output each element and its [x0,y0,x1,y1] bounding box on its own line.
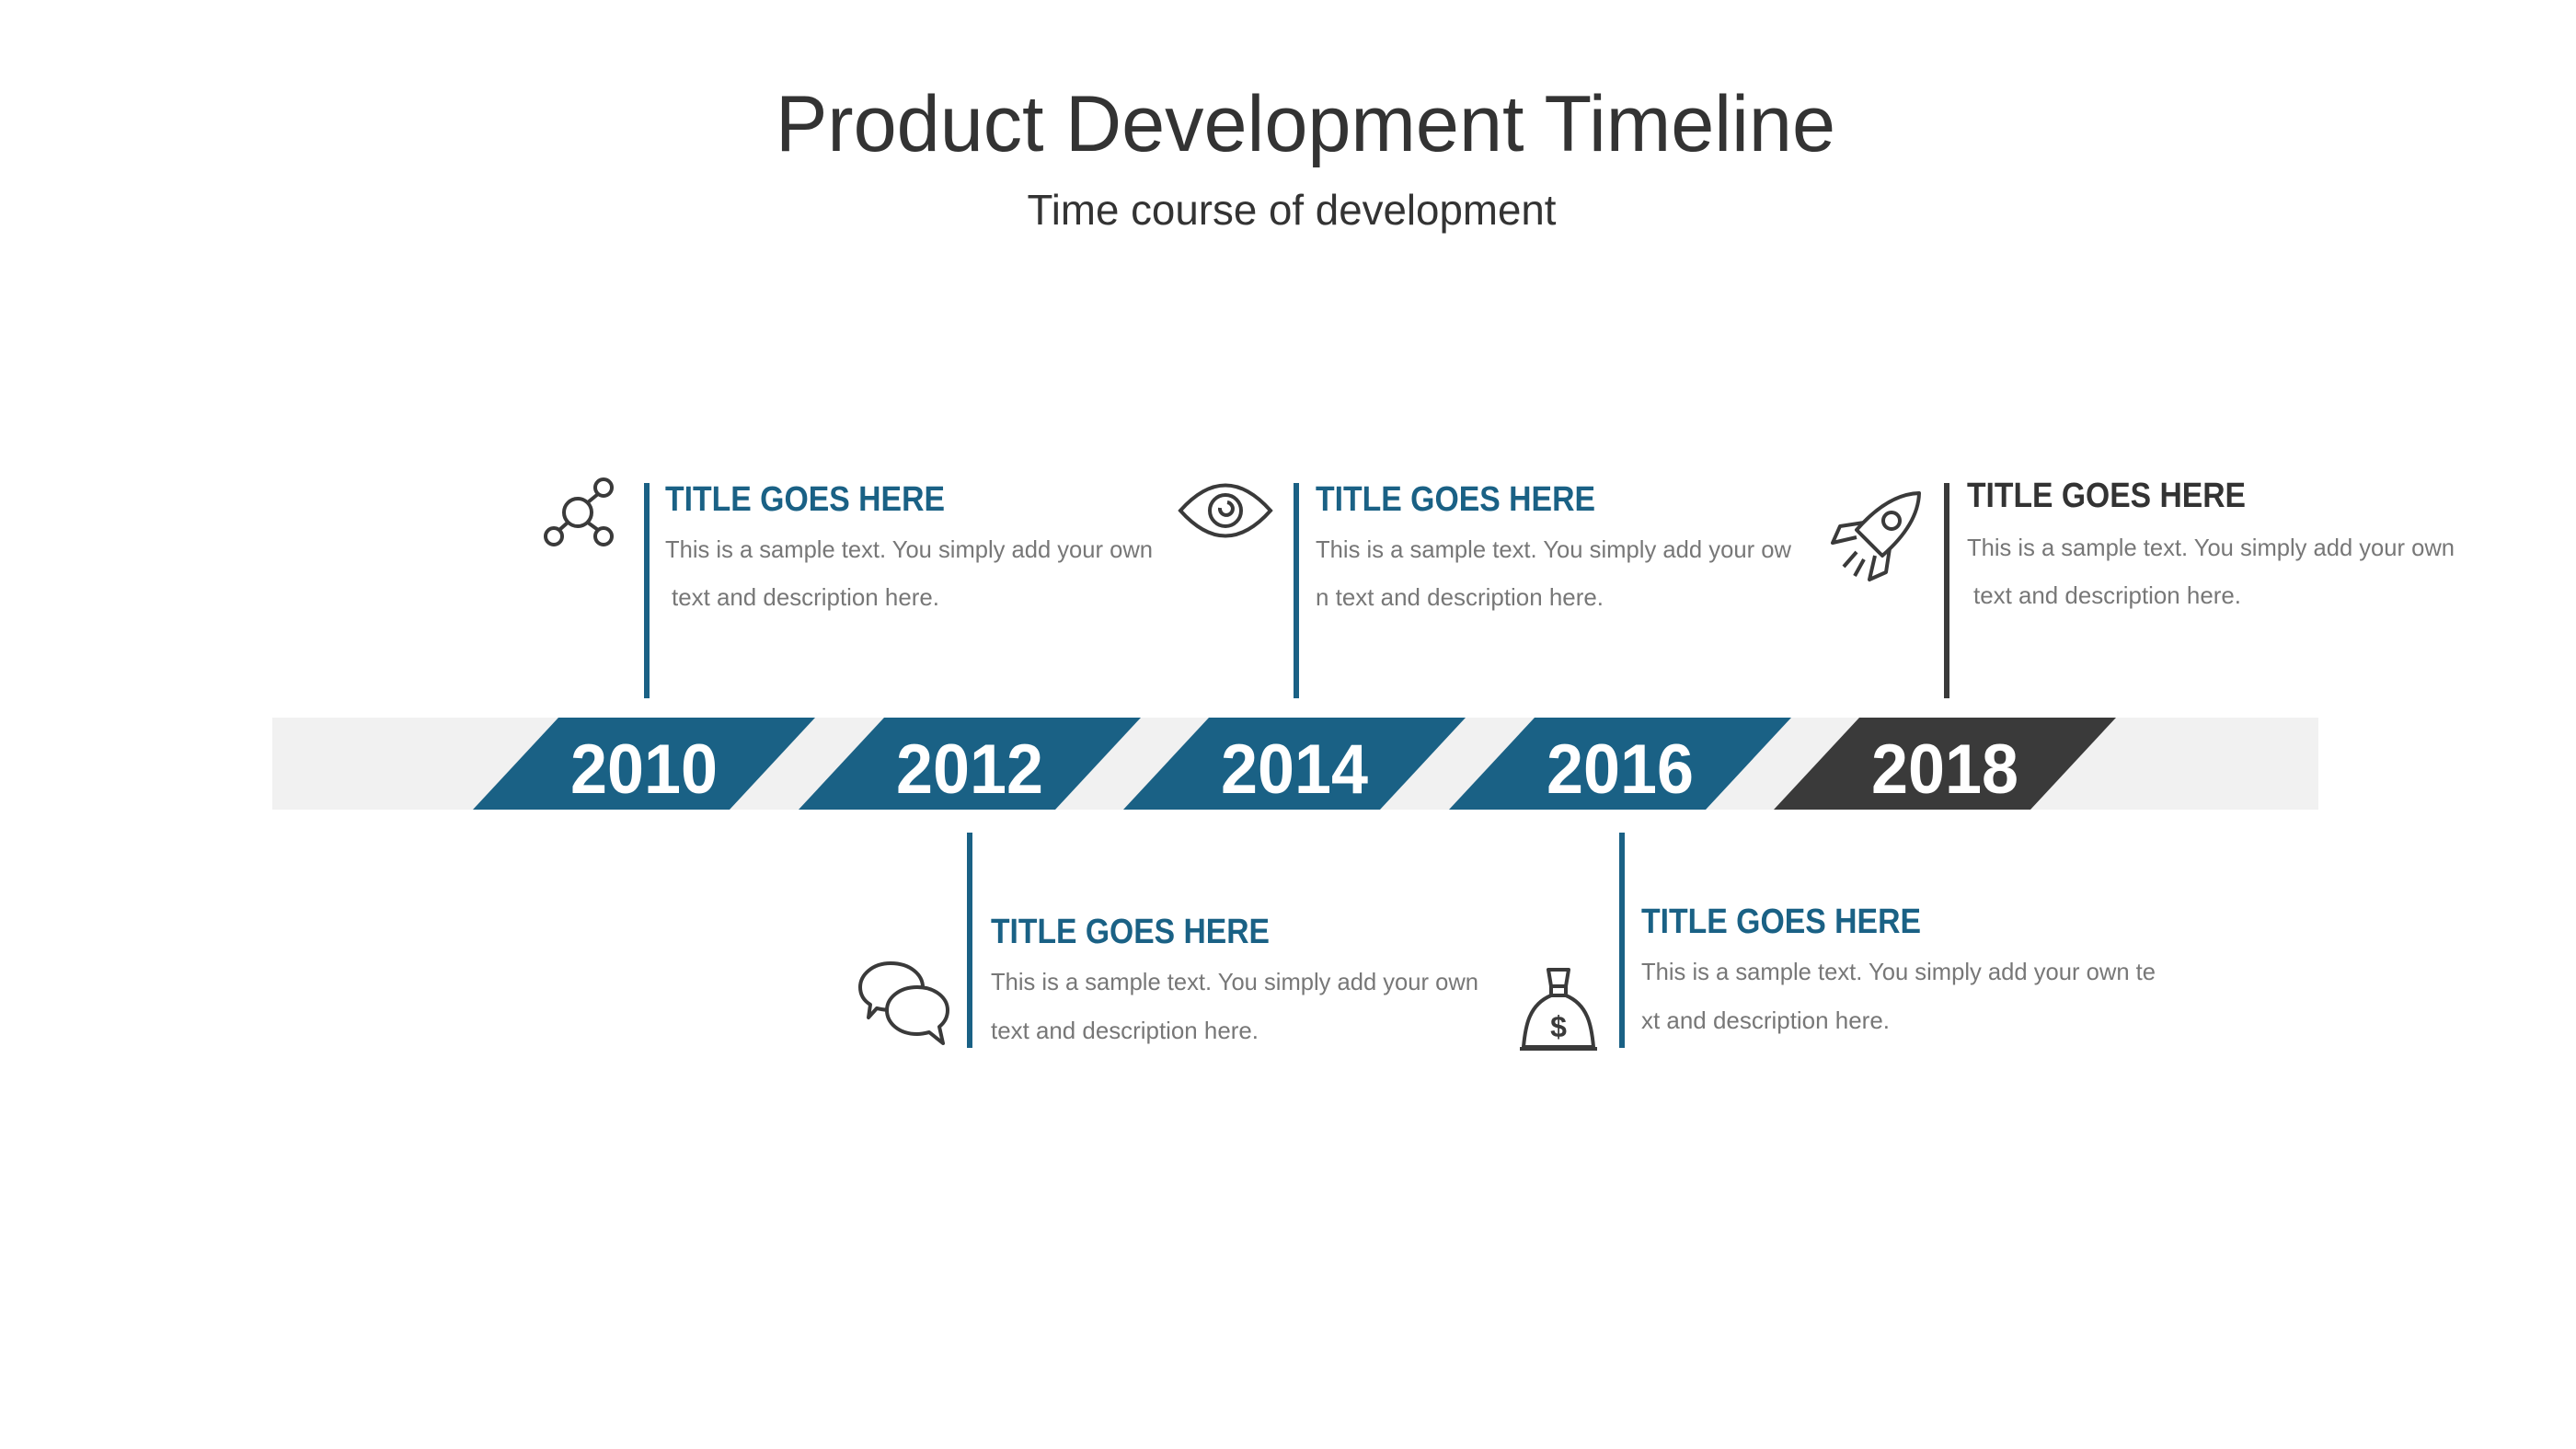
item: 2016: This is a sample text. You simply add your own te [1641,958,2156,985]
banner: 2014 [1123,718,1466,810]
timeline band [272,718,2318,810]
item: 2010: This is a sample text. You simply add your own [665,535,1153,563]
icon: molecule [546,479,612,545]
item: 2012: This is a sample text. You simply add your own [991,968,1478,995]
banner: 2018: 2018 [1871,730,2018,809]
banner: 2010 [473,718,815,810]
title: Product Development Timeline [776,80,1835,168]
item: 2016 [1619,833,2156,1048]
item: 2014: TITLE GOES HERE [1316,480,1595,519]
icon: eye [1180,486,1271,535]
item: 2012: TITLE GOES HERE [991,913,1270,951]
item: 2018 [1944,477,2455,698]
item: 2012: text and description here. [991,1017,1259,1044]
subtitle: Time course of development [1027,186,1557,234]
icon: money bag: $ [1550,1010,1567,1043]
item: 2012 [967,833,1478,1048]
item: 2014 [1294,480,1791,698]
item: 2010: TITLE GOES HERE [665,480,945,519]
banner: 2010: 2010 [570,730,718,809]
item: 2018: text and description here. [1973,581,2241,609]
item: 2014: n text and description here. [1316,583,1604,611]
banner: 2014: 2014 [1221,730,1368,809]
banner: 2012 [799,718,1141,810]
icon: money bag [1520,970,1597,1049]
icon: rocket [1833,493,1919,580]
item: 2018: This is a sample text. You simply add your own [1967,534,2455,561]
item: 2010: text and description here. [672,583,939,611]
icon: chat bubbles [860,963,948,1043]
item: 2016: TITLE GOES HERE [1641,903,1921,941]
banner: 2012: 2012 [896,730,1043,809]
item: 2018: TITLE GOES HERE [1967,477,2246,515]
banner: 2018 [1774,718,2116,810]
item: 2010 [644,480,1153,698]
banner: 2016: 2016 [1547,730,1694,809]
item: 2016: xt and description here. [1641,1006,1890,1034]
banner: 2016 [1449,718,1791,810]
item: 2014: This is a sample text. You simply add your ow [1316,535,1791,563]
